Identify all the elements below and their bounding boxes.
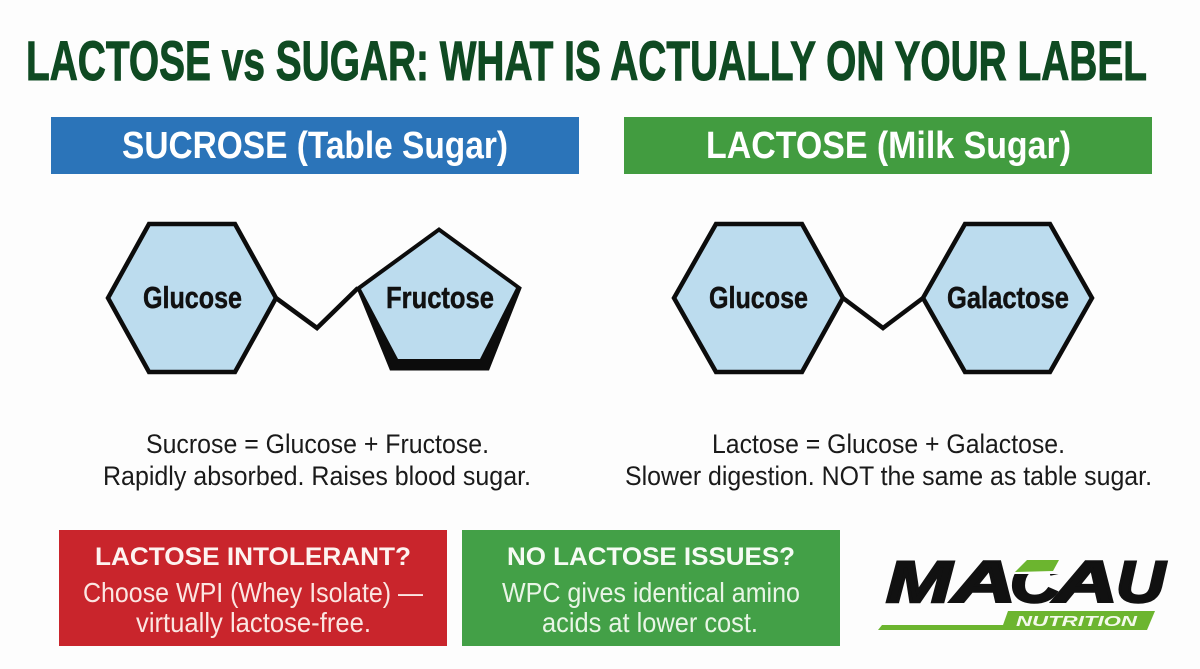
callout: no lactose issues (462, 530, 840, 646)
logo wordmark: U (1116, 550, 1167, 615)
hexagon: glucose (674, 224, 843, 372)
logo accent on C (1015, 560, 1059, 572)
logo wordmark: A (1051, 550, 1118, 615)
description: sucrose (103, 429, 531, 491)
bond: lactose (843, 298, 923, 328)
logo: Macau Nutrition (878, 560, 1168, 630)
callout: lactose intolerant: LACTOSE INTOLERANT? (95, 543, 411, 571)
logo wordmark: A (949, 550, 1016, 615)
pentagon: fructose (358, 229, 520, 369)
logo wordmark: M (886, 550, 954, 615)
panel: lactose (624, 117, 1152, 491)
pentagon: fructose: Fructose (386, 280, 494, 315)
description: lactose (625, 429, 1152, 491)
logo wordmark: C (1010, 550, 1061, 615)
heading: lactose (624, 117, 1152, 174)
heading: sucrose (51, 117, 579, 174)
hexagon: galactose: Galactose (947, 280, 1069, 315)
hexagon: glucose: Glucose (709, 280, 808, 315)
hexagon: glucose (108, 224, 276, 372)
callout: no lactose issues: WPC gives identical amino (502, 577, 800, 608)
logo stripe (878, 611, 1155, 630)
hexagon: glucose: Glucose (143, 280, 242, 315)
panel: sucrose (51, 117, 579, 491)
callout: no lactose issues: acids at lower cost. (542, 607, 758, 638)
callout: lactose intolerant (59, 530, 447, 646)
callout: lactose intolerant: virtually lactose-free. (136, 607, 371, 638)
diagram: sucrose molecule (108, 224, 520, 372)
callout: no lactose issues: NO LACTOSE ISSUES? (507, 543, 795, 571)
heading: sucrose: SUCROSE (Table Sugar) (122, 125, 508, 167)
logo sub-text: NUTRITION (1016, 613, 1139, 630)
hexagon: galactose (923, 224, 1092, 372)
description: sucrose: Sucrose = Glucose + Fructose. (146, 429, 489, 459)
description: lactose: Lactose = Glucose + Galactose. (712, 429, 1065, 459)
diagram: lactose molecule (674, 224, 1092, 372)
callout: lactose intolerant: Choose WPI (Whey Isolate) — (83, 577, 423, 608)
bond: sucrose (276, 288, 358, 328)
heading: lactose: LACTOSE (Milk Sugar) (706, 125, 1071, 167)
description: lactose: Slower digestion. NOT the same as table sugar. (625, 461, 1152, 491)
description: sucrose: Rapidly absorbed. Raises blood sugar. (103, 461, 531, 491)
logo wordmark (885, 560, 1168, 604)
